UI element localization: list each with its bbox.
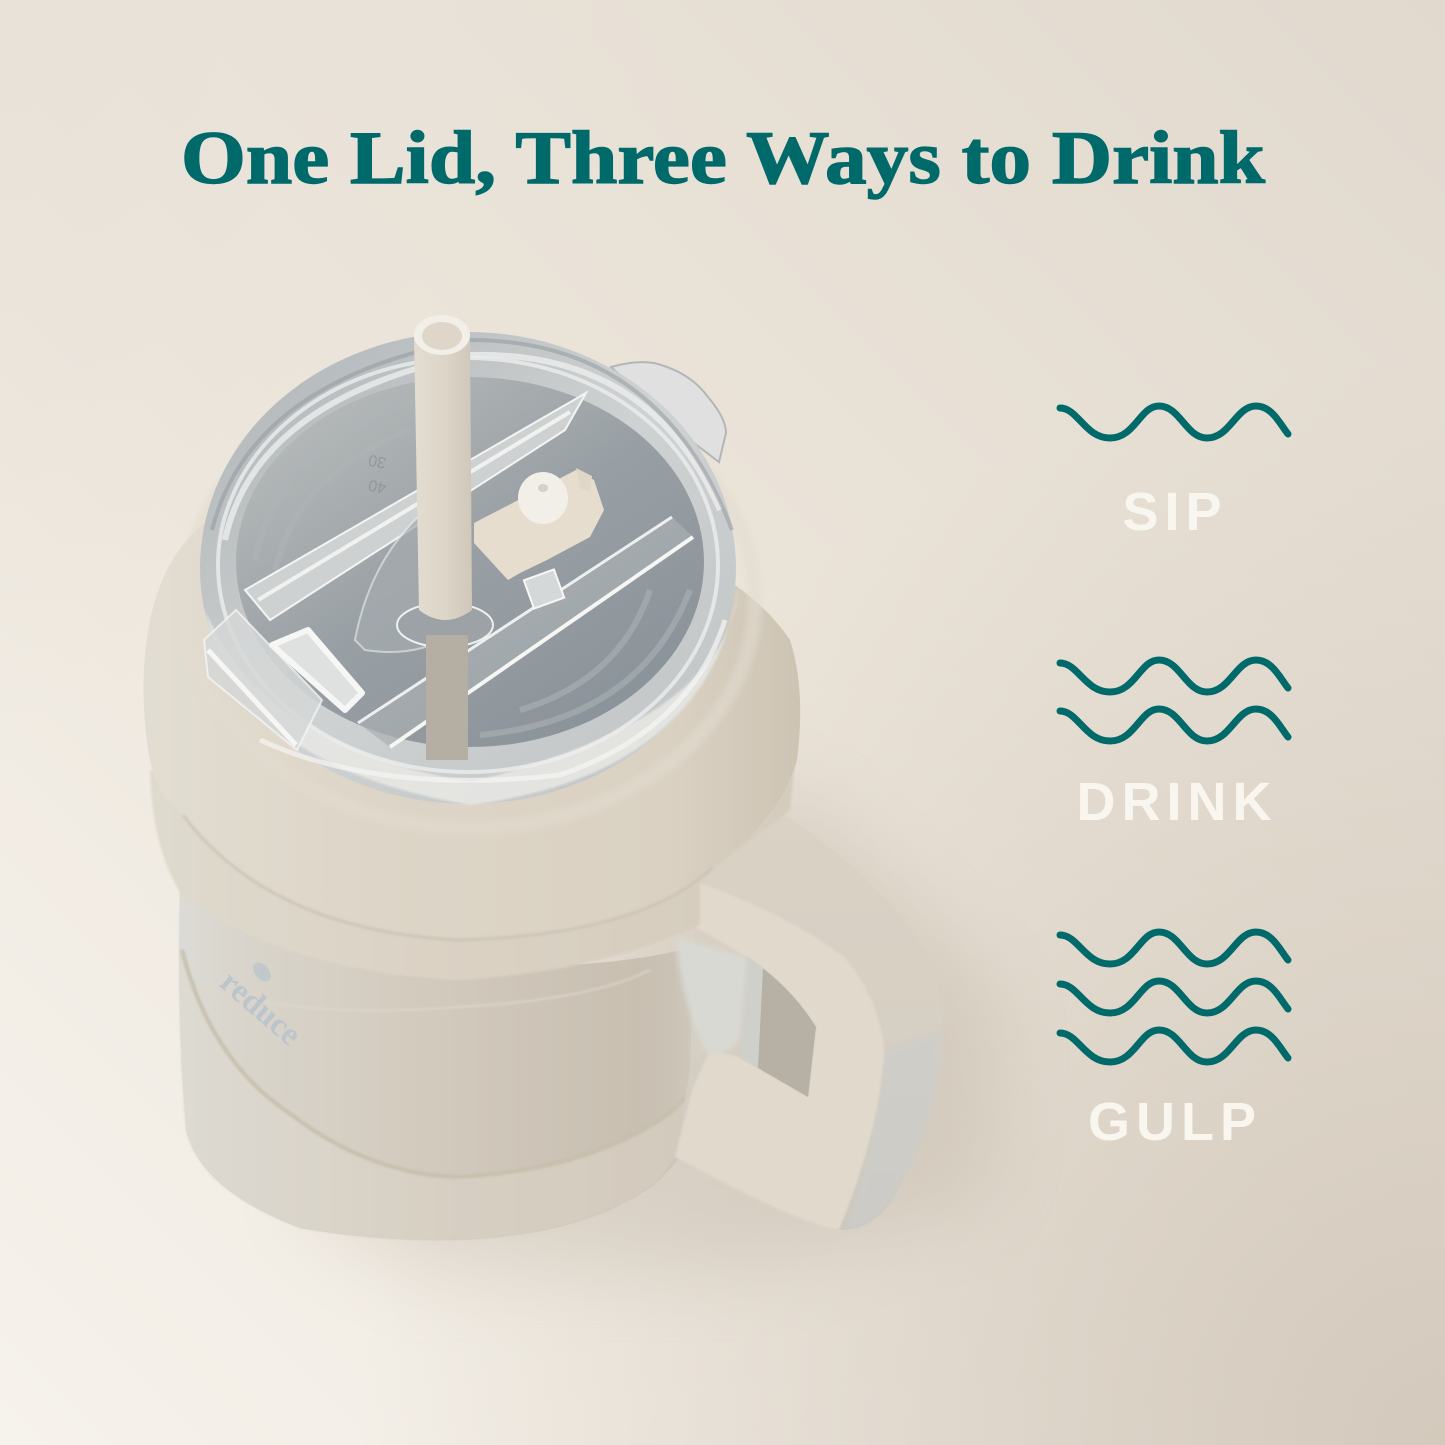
handle front face: [675, 883, 884, 1230]
title: One Lid, Three Ways to Drink: [181, 117, 1265, 200]
wave: sip: [1060, 406, 1288, 438]
wave: gulp: [1060, 932, 1288, 1062]
slider clip: [474, 468, 604, 609]
straw: [414, 335, 472, 620]
dome flange ring: [185, 372, 755, 828]
label: gulp: GULP: [1088, 1092, 1262, 1152]
lid right tab: [611, 362, 726, 462]
lid rings: [255, 400, 690, 735]
lower band: [180, 950, 712, 1240]
label: drink: DRINK: [1076, 772, 1278, 832]
body reflection beside handle: [676, 938, 747, 1055]
handle side reflection: [845, 1030, 942, 1230]
lid inner window: [236, 377, 704, 747]
mug handle: [675, 800, 943, 1230]
lid slider track: [358, 517, 693, 747]
lid left tab: [204, 610, 322, 750]
lid socket: [355, 510, 470, 652]
capacity marks: [367, 451, 388, 496]
handle window: [739, 957, 816, 1097]
capacity marks: 30: [367, 451, 388, 471]
capacity marks: 40: [367, 476, 388, 496]
upper band: [150, 760, 795, 980]
mug: [143, 315, 943, 1240]
lid: [200, 315, 738, 805]
straw ghost below lid: [426, 635, 468, 760]
body crease line: [190, 970, 650, 1011]
dome shoulder: [143, 520, 800, 940]
mug lower body: [179, 880, 750, 1240]
wave: drink: [1060, 660, 1288, 741]
handle silhouette: [675, 800, 943, 1230]
drop shadow: [300, 780, 1000, 1270]
logo: reduce: [213, 964, 308, 1053]
lid upper bar: [245, 393, 586, 620]
label: sip: SIP: [1122, 482, 1228, 542]
drink opening: [272, 630, 362, 710]
lid rim: [200, 332, 736, 804]
